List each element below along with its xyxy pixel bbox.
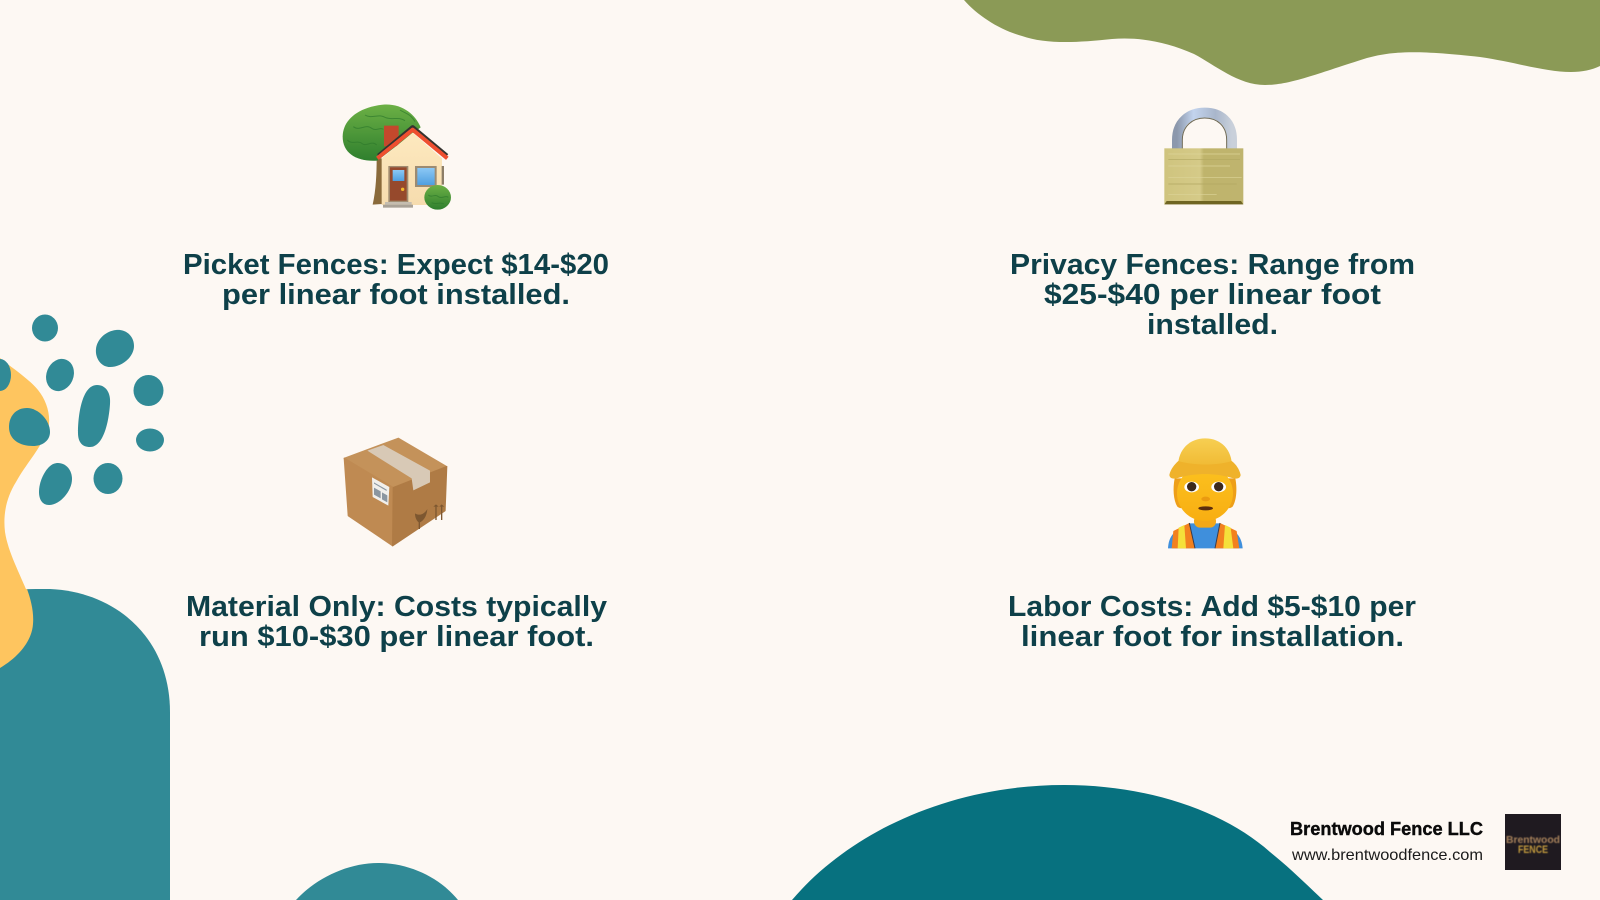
text: labor costs bbox=[1008, 591, 1416, 653]
text: picket fences bbox=[183, 249, 609, 311]
yellow blob overlap bbox=[0, 589, 33, 668]
text: material only bbox=[186, 591, 607, 653]
text: material only: run $10-$30 per linear foot. bbox=[199, 621, 594, 653]
icon: cardboard box bbox=[344, 438, 447, 546]
olive wave top right bbox=[964, 0, 1600, 85]
text: picket fences: per linear foot installed. bbox=[222, 279, 570, 311]
logo: Brentwood bbox=[1506, 835, 1560, 846]
text: labor costs: linear foot for installation. bbox=[1021, 621, 1404, 653]
panel: privacy fences bbox=[1010, 113, 1415, 341]
text: privacy fences: $25-$40 per linear foot bbox=[1044, 279, 1382, 311]
panel: picket fences bbox=[183, 105, 609, 311]
large dark teal hill bottom bbox=[792, 785, 1323, 900]
icon: construction worker bbox=[1168, 438, 1243, 548]
company name: Brentwood Fence LLC bbox=[1290, 818, 1483, 839]
text: privacy fences bbox=[1010, 249, 1415, 341]
text: labor costs: Labor Costs: Add $5-$10 per bbox=[1008, 591, 1416, 623]
logo bbox=[1505, 814, 1561, 870]
panel: material only bbox=[186, 438, 607, 653]
icon: padlock bbox=[1164, 113, 1243, 204]
text: material only: Material Only: Costs typically bbox=[186, 591, 607, 623]
icon: house with tree bbox=[343, 105, 451, 210]
teal dots cluster bbox=[0, 314, 164, 505]
teal hill bottom left bbox=[0, 589, 170, 900]
logo: FENCE bbox=[1518, 844, 1548, 856]
small teal hill bottom bbox=[296, 863, 458, 900]
text: privacy fences: installed. bbox=[1147, 309, 1278, 341]
yellow blob left bbox=[0, 358, 49, 668]
panel: labor costs bbox=[1008, 438, 1416, 653]
website: www.brentwoodfence.com bbox=[1291, 847, 1483, 864]
text: picket fences: Picket Fences: Expect $14-$20 bbox=[183, 249, 609, 281]
branding block bbox=[1290, 814, 1561, 870]
text: privacy fences: Privacy Fences: Range from bbox=[1010, 249, 1415, 281]
